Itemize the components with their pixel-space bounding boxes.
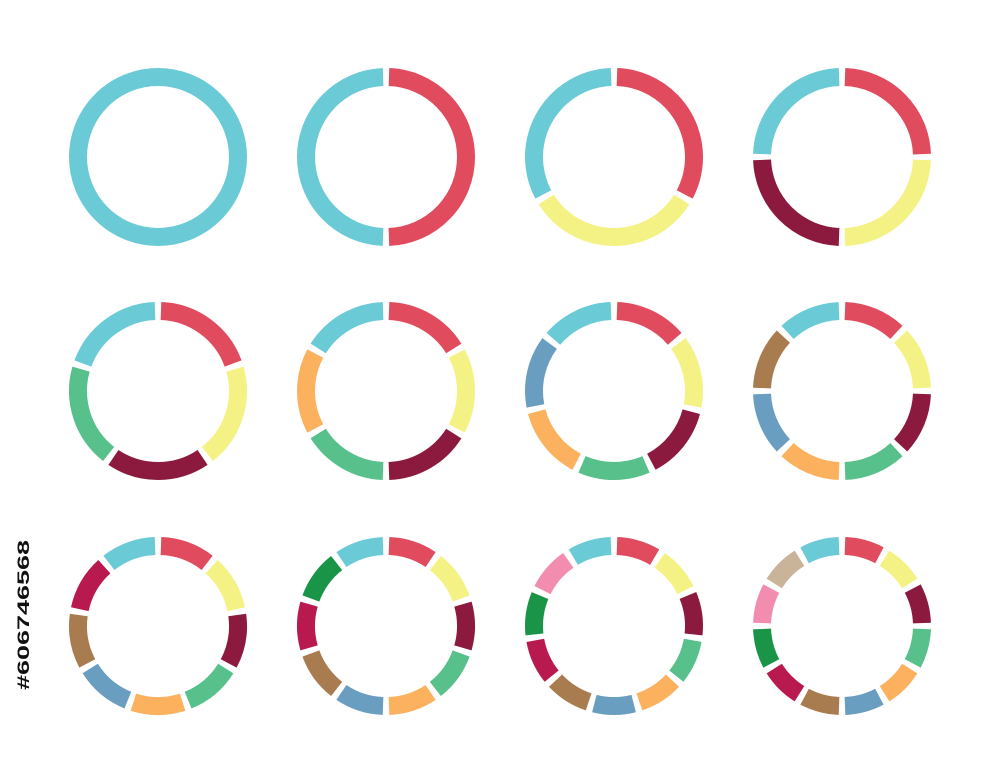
- ring: 6 segments: [277, 282, 495, 500]
- ring: 10 segments: [274, 514, 498, 738]
- ring: 2 segments: [306, 77, 466, 237]
- ring: 11 segments: [501, 513, 727, 739]
- ring: 5 segments: [46, 279, 270, 503]
- ring: 4 segments: [762, 77, 922, 237]
- ring: 3 segments: [505, 48, 723, 266]
- ring: 7 segments: [502, 279, 726, 503]
- stock id text: #606746568: [14, 540, 33, 690]
- ring: 1 segment: [78, 77, 238, 237]
- ring: 12 segments: [733, 517, 951, 735]
- ring: 8 segments: [729, 278, 955, 504]
- ring: 9 segments: [45, 513, 271, 739]
